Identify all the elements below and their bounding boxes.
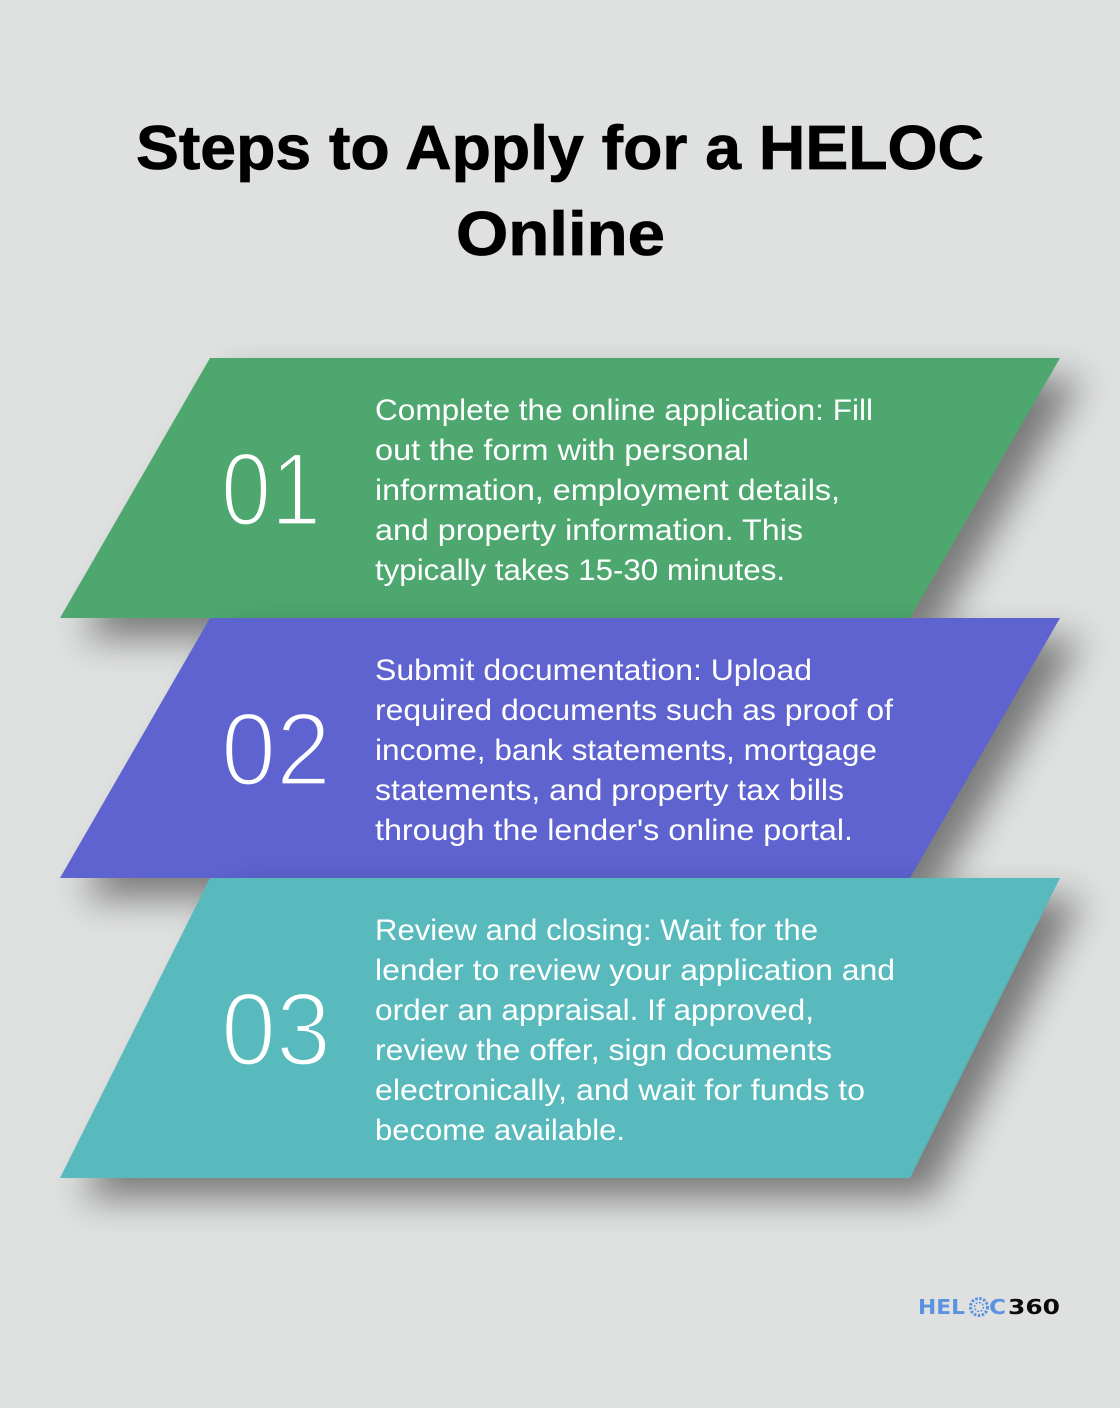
step 01 text: out the form with personal (375, 434, 749, 467)
step 03 text (375, 914, 895, 1147)
step 03 text: electronically, and wait for funds to (375, 1074, 865, 1107)
icon: swirl (970, 1298, 988, 1316)
step number 01: 01 (221, 432, 321, 548)
title (136, 114, 984, 269)
panel: step 01 (60, 358, 1082, 638)
panel: step 02 (60, 618, 1082, 898)
logo: HELOC360: 360 (1008, 1295, 1060, 1319)
step 01 text: and property information. This (375, 514, 803, 547)
step 03 text: lender to review your application and (375, 954, 895, 987)
step 03 text: review the offer, sign documents (375, 1034, 832, 1067)
step 03 text: order an appraisal. If approved, (375, 994, 814, 1027)
step 02 text (375, 654, 894, 847)
step 02 text: statements, and property tax bills (375, 774, 844, 807)
logo: HELOC360 (918, 1295, 1060, 1319)
step 02 text: Submit documentation: Upload (375, 654, 812, 687)
step 02 text: income, bank statements, mortgage (375, 734, 877, 767)
step number 03: 03 (221, 972, 331, 1088)
step 03 text: become available. (375, 1114, 625, 1147)
step 01 text: typically takes 15-30 minutes. (375, 554, 785, 587)
logo: HELOC360: C (989, 1295, 1006, 1319)
step 02 text: required documents such as proof of (375, 694, 894, 727)
title: Steps to Apply for a HELOC (136, 114, 984, 183)
step 03 text: Review and closing: Wait for the (375, 914, 818, 947)
logo: HELOC360: HEL (918, 1295, 965, 1319)
title: Online (456, 200, 665, 269)
panel: step 03 (60, 878, 1082, 1198)
step 01 text: information, employment details, (375, 474, 840, 507)
step number 02: 02 (221, 692, 331, 808)
step 02 text: through the lender's online portal. (375, 814, 853, 847)
step 01 text (375, 394, 873, 587)
step 01 text: Complete the online application: Fill (375, 394, 873, 427)
